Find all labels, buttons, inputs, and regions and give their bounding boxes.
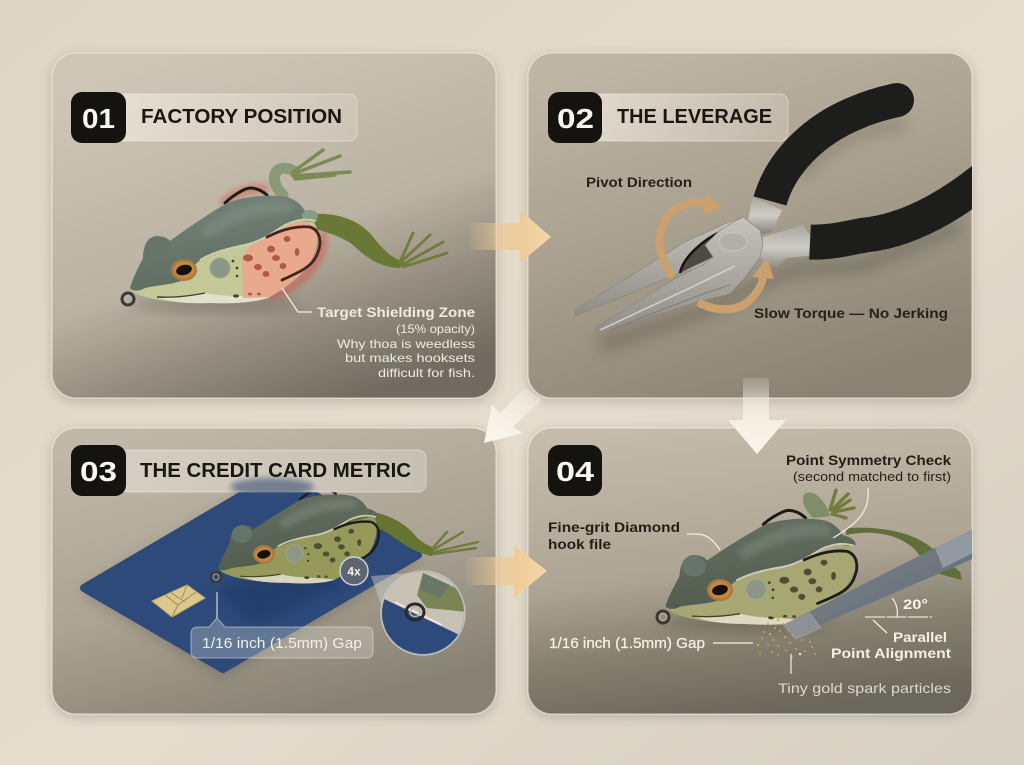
panel 4: filing	[528, 428, 975, 714]
gap label	[191, 618, 373, 658]
leader: gap	[713, 642, 753, 644]
panel 3: the credit card metric	[52, 428, 496, 714]
heading: 02 the leverage	[548, 92, 788, 143]
heading: 01 factory position: FACTORY POSITION	[141, 106, 342, 128]
pivot direction arc	[660, 195, 723, 277]
callout: target shielding zone	[317, 304, 475, 380]
leader line to target shielding zone	[282, 288, 312, 312]
heading: 03 the credit card metric: THE CREDIT CARD METRIC	[140, 460, 411, 482]
label: pivot direction: Pivot Direction	[586, 175, 692, 190]
callout: target shielding zone: Target Shielding Zone	[317, 304, 475, 320]
heading: 03 the credit card metric: 03	[80, 456, 117, 487]
heading: 02 the leverage: THE LEVERAGE	[617, 106, 772, 128]
callout: target shielding zone: (15% opacity)	[396, 322, 475, 336]
gold sparks	[757, 615, 816, 658]
frog lure on card	[211, 484, 478, 588]
heading: 04 number badge	[548, 445, 602, 496]
heading: 01 factory position: 01	[82, 103, 115, 134]
leader: parallel alignment	[873, 620, 887, 633]
frog lure being filed	[657, 490, 962, 630]
heading: 01 factory position	[71, 92, 357, 143]
label: parallel point alignment: Point Alignment	[831, 645, 951, 661]
slow torque arc	[698, 258, 774, 309]
label: parallel point alignment: Parallel	[893, 629, 947, 645]
label: parallel point alignment	[831, 629, 951, 661]
label: gap: 1/16 inch (1.5mm) Gap	[549, 635, 705, 652]
leader: sparks	[790, 654, 792, 674]
angle marker 20 degrees: 20°	[903, 596, 928, 612]
magnifier	[380, 570, 470, 660]
heading: 02 the leverage: 02	[557, 103, 594, 134]
gap label: 1/16 inch (1.5mm) Gap	[202, 635, 362, 652]
callout: target shielding zone: difficult for fish.	[378, 366, 475, 380]
panel 1: factory position	[52, 53, 496, 398]
4x badge: 4x	[347, 564, 361, 578]
label: fine-grit diamond hook file: Fine-grit Diamond	[548, 519, 680, 535]
arrow: step 3 to 4	[467, 545, 547, 598]
pliers	[575, 83, 985, 345]
heading: 04 number badge: 04	[556, 456, 595, 487]
panel 2: the leverage	[528, 53, 985, 398]
zoom cone	[371, 572, 424, 613]
leader: symmetry check	[833, 488, 868, 538]
label: tiny gold spark particles: Tiny gold spark particles	[778, 680, 951, 696]
arrow: step 1 to 2	[470, 210, 551, 263]
label: point symmetry check: (second matched to first)	[793, 470, 951, 484]
4x badge	[340, 557, 368, 585]
label: fine-grit diamond hook file	[548, 519, 680, 552]
callout: target shielding zone: but makes hooksets	[345, 351, 475, 365]
gap pointer line	[216, 592, 218, 618]
label: fine-grit diamond hook file: hook file	[548, 536, 611, 552]
angle marker 20 degrees	[865, 596, 932, 617]
arrow: step 2 to 4	[728, 378, 786, 454]
callout: target shielding zone: Why thoa is weedless	[337, 337, 475, 351]
heading: 03 the credit card metric	[71, 445, 426, 496]
credit card	[80, 474, 422, 677]
label: slow torque: Slow Torque — No Jerking	[754, 305, 948, 321]
card chip	[152, 585, 205, 617]
label: point symmetry check	[786, 452, 951, 484]
leader: hook file	[687, 534, 720, 550]
diamond hook file	[783, 530, 975, 640]
arrow: step 2 to 3	[484, 388, 542, 443]
label: point symmetry check: Point Symmetry Check	[786, 452, 951, 468]
frog lure with shielding zone	[122, 150, 447, 311]
